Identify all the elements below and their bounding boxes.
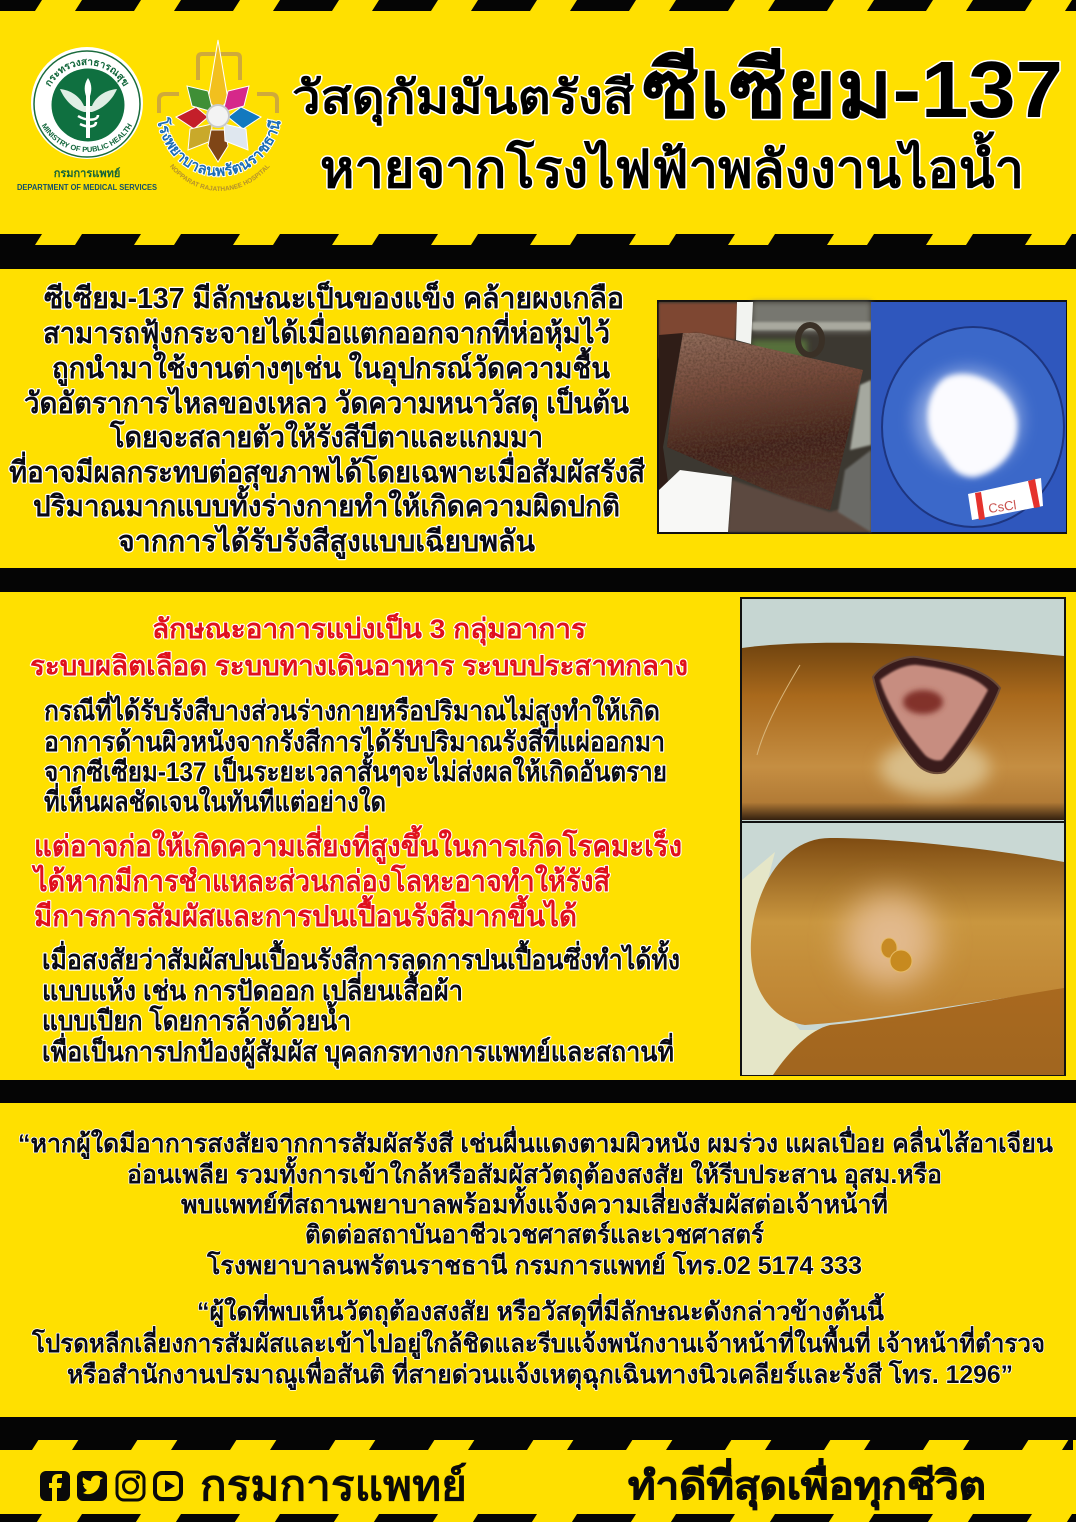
text block: about cesium-137: วัดอัตราการไหลของเหลว วัดความหนาวัสดุ เป็นต้น <box>24 385 629 421</box>
footer: department name: กรมการแพทย์ <box>200 1462 467 1509</box>
text block: partial exposure: ที่เห็นผลชัดเจนในทันทีแต่อย่างใด <box>44 782 386 817</box>
icon: twitter <box>77 1471 107 1501</box>
text block: suspicious object warning <box>31 1292 1045 1391</box>
icon: ministry of public health logo: DEPARTMENT OF MEDICAL SERVICES <box>17 183 158 192</box>
text block: decontamination: แบบแห้ง เช่น การปัดออก เปลี่ยนเสื้อผ้า <box>42 970 463 1006</box>
photos: radiation skin injuries <box>740 597 1066 1076</box>
title <box>292 45 1063 199</box>
text block: about cesium-137: สามารถฟุ้งกระจายได้เมื่อแตกออกจากที่ห่อหุ้มไว้ <box>43 312 610 351</box>
text block: suspicious object warning: หรือสำนักงานปรมาณูเพื่อสันติ ที่สายด่วนแจ้งเหตุฉุกเฉินทางนิวเคลียร์และรังสี โทร. 1296” <box>67 1357 1013 1391</box>
hazard band above footer <box>0 1417 1076 1450</box>
photo: cesium chloride powder in dish: CsCl <box>987 497 1017 516</box>
text block: about cesium-137: ที่อาจมีผลกระทบต่อสุขภาพได้โดยเฉพาะเมื่อสัมผัสรังสี <box>9 451 645 490</box>
icon: ministry of public health logo: MINISTRY OF PUBLIC HEALTH <box>42 123 132 152</box>
text block: seek medical care <box>18 1126 1053 1280</box>
heading: three symptom groups: ระบบผลิตเลือด ระบบทางเดินอาหาร ระบบประสาทกลาง <box>30 651 688 681</box>
text block: partial exposure: จากซีเซียม-137 เป็นระยะเวลาสั้นๆจะไม่ส่งผลให้เกิดอันตราย <box>44 751 667 787</box>
text block: about cesium-137: โดยจะสลายตัวให้รังสีบีตาและแกมมา <box>109 419 543 454</box>
title: หายจากโรงไฟฟ้าพลังงานไอน้ำ <box>320 131 1024 199</box>
text block: about cesium-137: จากการได้รับรังสีสูงแบบเฉียบพลัน <box>118 524 535 559</box>
icon: ministry of public health logo: กรมการแพทย์ <box>54 167 120 180</box>
text block: decontamination: เพื่อเป็นการปกป้องผู้สัมผัส บุคลกรทางการแพทย์และสถานที่ <box>42 1032 674 1069</box>
black divider band <box>0 1080 1076 1103</box>
text block: about cesium-137: ถูกนำมาใช้งานต่างๆเช่น ในอุปกรณ์วัดความชื้น <box>52 346 610 386</box>
callout: cancer risk warning: แต่อาจก่อให้เกิดความเสี่ยงที่สูงขึ้นในการเกิดโรคมะเร็ง <box>34 824 682 864</box>
text block: partial exposure: อาการด้านผิวหนังจากรังสีการได้รับปริมาณรังสีที่แผ่ออกมา <box>44 722 665 757</box>
text block: seek medical care: โรงพยาบาลนพรัตนราชธานี กรมการแพทย์ โทร.02 5174 333 <box>206 1250 862 1280</box>
icon: instagram <box>117 1472 144 1500</box>
text block: decontamination: แบบเปียก โดยการล้างด้วยน้ำ <box>42 1000 351 1036</box>
top hazard stripe <box>0 0 1076 11</box>
text block: about cesium-137 <box>9 280 645 559</box>
title: วัสดุกัมมันตรังสี <box>292 71 635 126</box>
icon: nopparat rajathanee hospital logo: โรงพยาบาลนพรัตนราชธานี <box>156 116 282 178</box>
icon: nopparat rajathanee hospital logo: NOPPARAT RAJATHANEE HOSPITAL <box>170 164 270 191</box>
text block: seek medical care: อ่อนเพลีย รวมทั้งการเข้าใกล้หรือสัมผัสวัตถุต้องสงสัย ให้รีบประสาน อุสม.หรือ <box>127 1155 942 1191</box>
photo: rusty capsule <box>659 302 871 532</box>
photos: radioactive capsule and cesium chloride <box>657 300 1067 534</box>
text block: decontamination: เมื่อสงสัยว่าสัมผัสปนเปื้อนรังสีการลดการปนเปื้อนซึ่งทำได้ทั้ง <box>42 939 680 975</box>
text block: suspicious object warning: โปรดหลีกเลี่ยงการสัมผัสและเข้าไปอยู่ใกล้ชิดและรีบแจ้งพนักงานเจ้าหน้าที่ในพื้นที่ เจ้าหน้าที่ตำรวจ <box>31 1324 1045 1360</box>
icon: nopparat rajathanee hospital logo <box>156 40 282 191</box>
icon: facebook <box>40 1471 70 1501</box>
callout: cancer risk warning <box>31 824 682 933</box>
icon: youtube <box>155 1473 181 1499</box>
title: ซีเซียม-137 <box>642 45 1063 134</box>
footer: slogan: ทำดีที่สุดเพื่อทุกชีวิต <box>628 1458 986 1510</box>
text block: seek medical care: “หากผู้ใดมีอาการสงสัยจากการสัมผัสรังสี เช่นผื่นแดงตามผิวหนัง ผมร่วง แผลเปื่อย คลื่นไส้อาเจียน <box>18 1126 1053 1160</box>
icon: ministry of public health logo: กระทรวงสาธารณสุข <box>46 58 128 87</box>
photo: skin blister <box>742 823 1064 1075</box>
text block: about cesium-137: ซีเซียม-137 มีลักษณะเป็นของแข็ง คล้ายผงเกลือ <box>44 280 624 315</box>
text block: partial exposure <box>44 691 667 817</box>
photo: skin ulcer <box>742 599 1064 821</box>
text block: seek medical care: พบแพทย์ที่สถานพยาบาลพร้อมทั้งแจ้งความเสี่ยงสัมผัสต่อเจ้าหน้าที่ <box>181 1185 888 1219</box>
black divider band <box>0 568 1076 592</box>
text block: about cesium-137: ปริมาณมากแบบทั้งร่างกายทำให้เกิดความผิดปกติ <box>33 484 620 523</box>
text block: seek medical care: ติดต่อสถาบันอาชีวเวชศาสตร์และเวชศาสตร์ <box>305 1220 765 1249</box>
hazard band below header <box>0 234 1076 269</box>
text block: partial exposure: กรณีที่ได้รับรังสีบางส่วนร่างกายหรือปริมาณไม่สูงทำให้เกิด <box>44 691 660 728</box>
text block: decontamination <box>42 939 680 1069</box>
callout: cancer risk warning: มีการการสัมผัสและการปนเปื้อนรังสีมากขึ้นได้ <box>34 894 577 933</box>
bottom hazard stripe <box>0 1514 1076 1522</box>
icon: ministry of public health logo <box>17 47 158 192</box>
text block: suspicious object warning: “ผู้ใดที่พบเห็นวัตถุต้องสงสัย หรือวัสดุที่มีลักษณะดังกล่าวข้างต้นนี้ <box>197 1292 885 1328</box>
heading: three symptom groups: ลักษณะอาการแบ่งเป็น 3 กลุ่มอาการ <box>152 611 587 646</box>
callout: cancer risk warning: ได้หากมีการชำแหละส่วนกล่องโลหะอาจทำให้รังสี <box>31 863 610 898</box>
photo: cesium chloride powder in dish <box>871 302 1066 532</box>
heading: three symptom groups <box>30 611 688 681</box>
